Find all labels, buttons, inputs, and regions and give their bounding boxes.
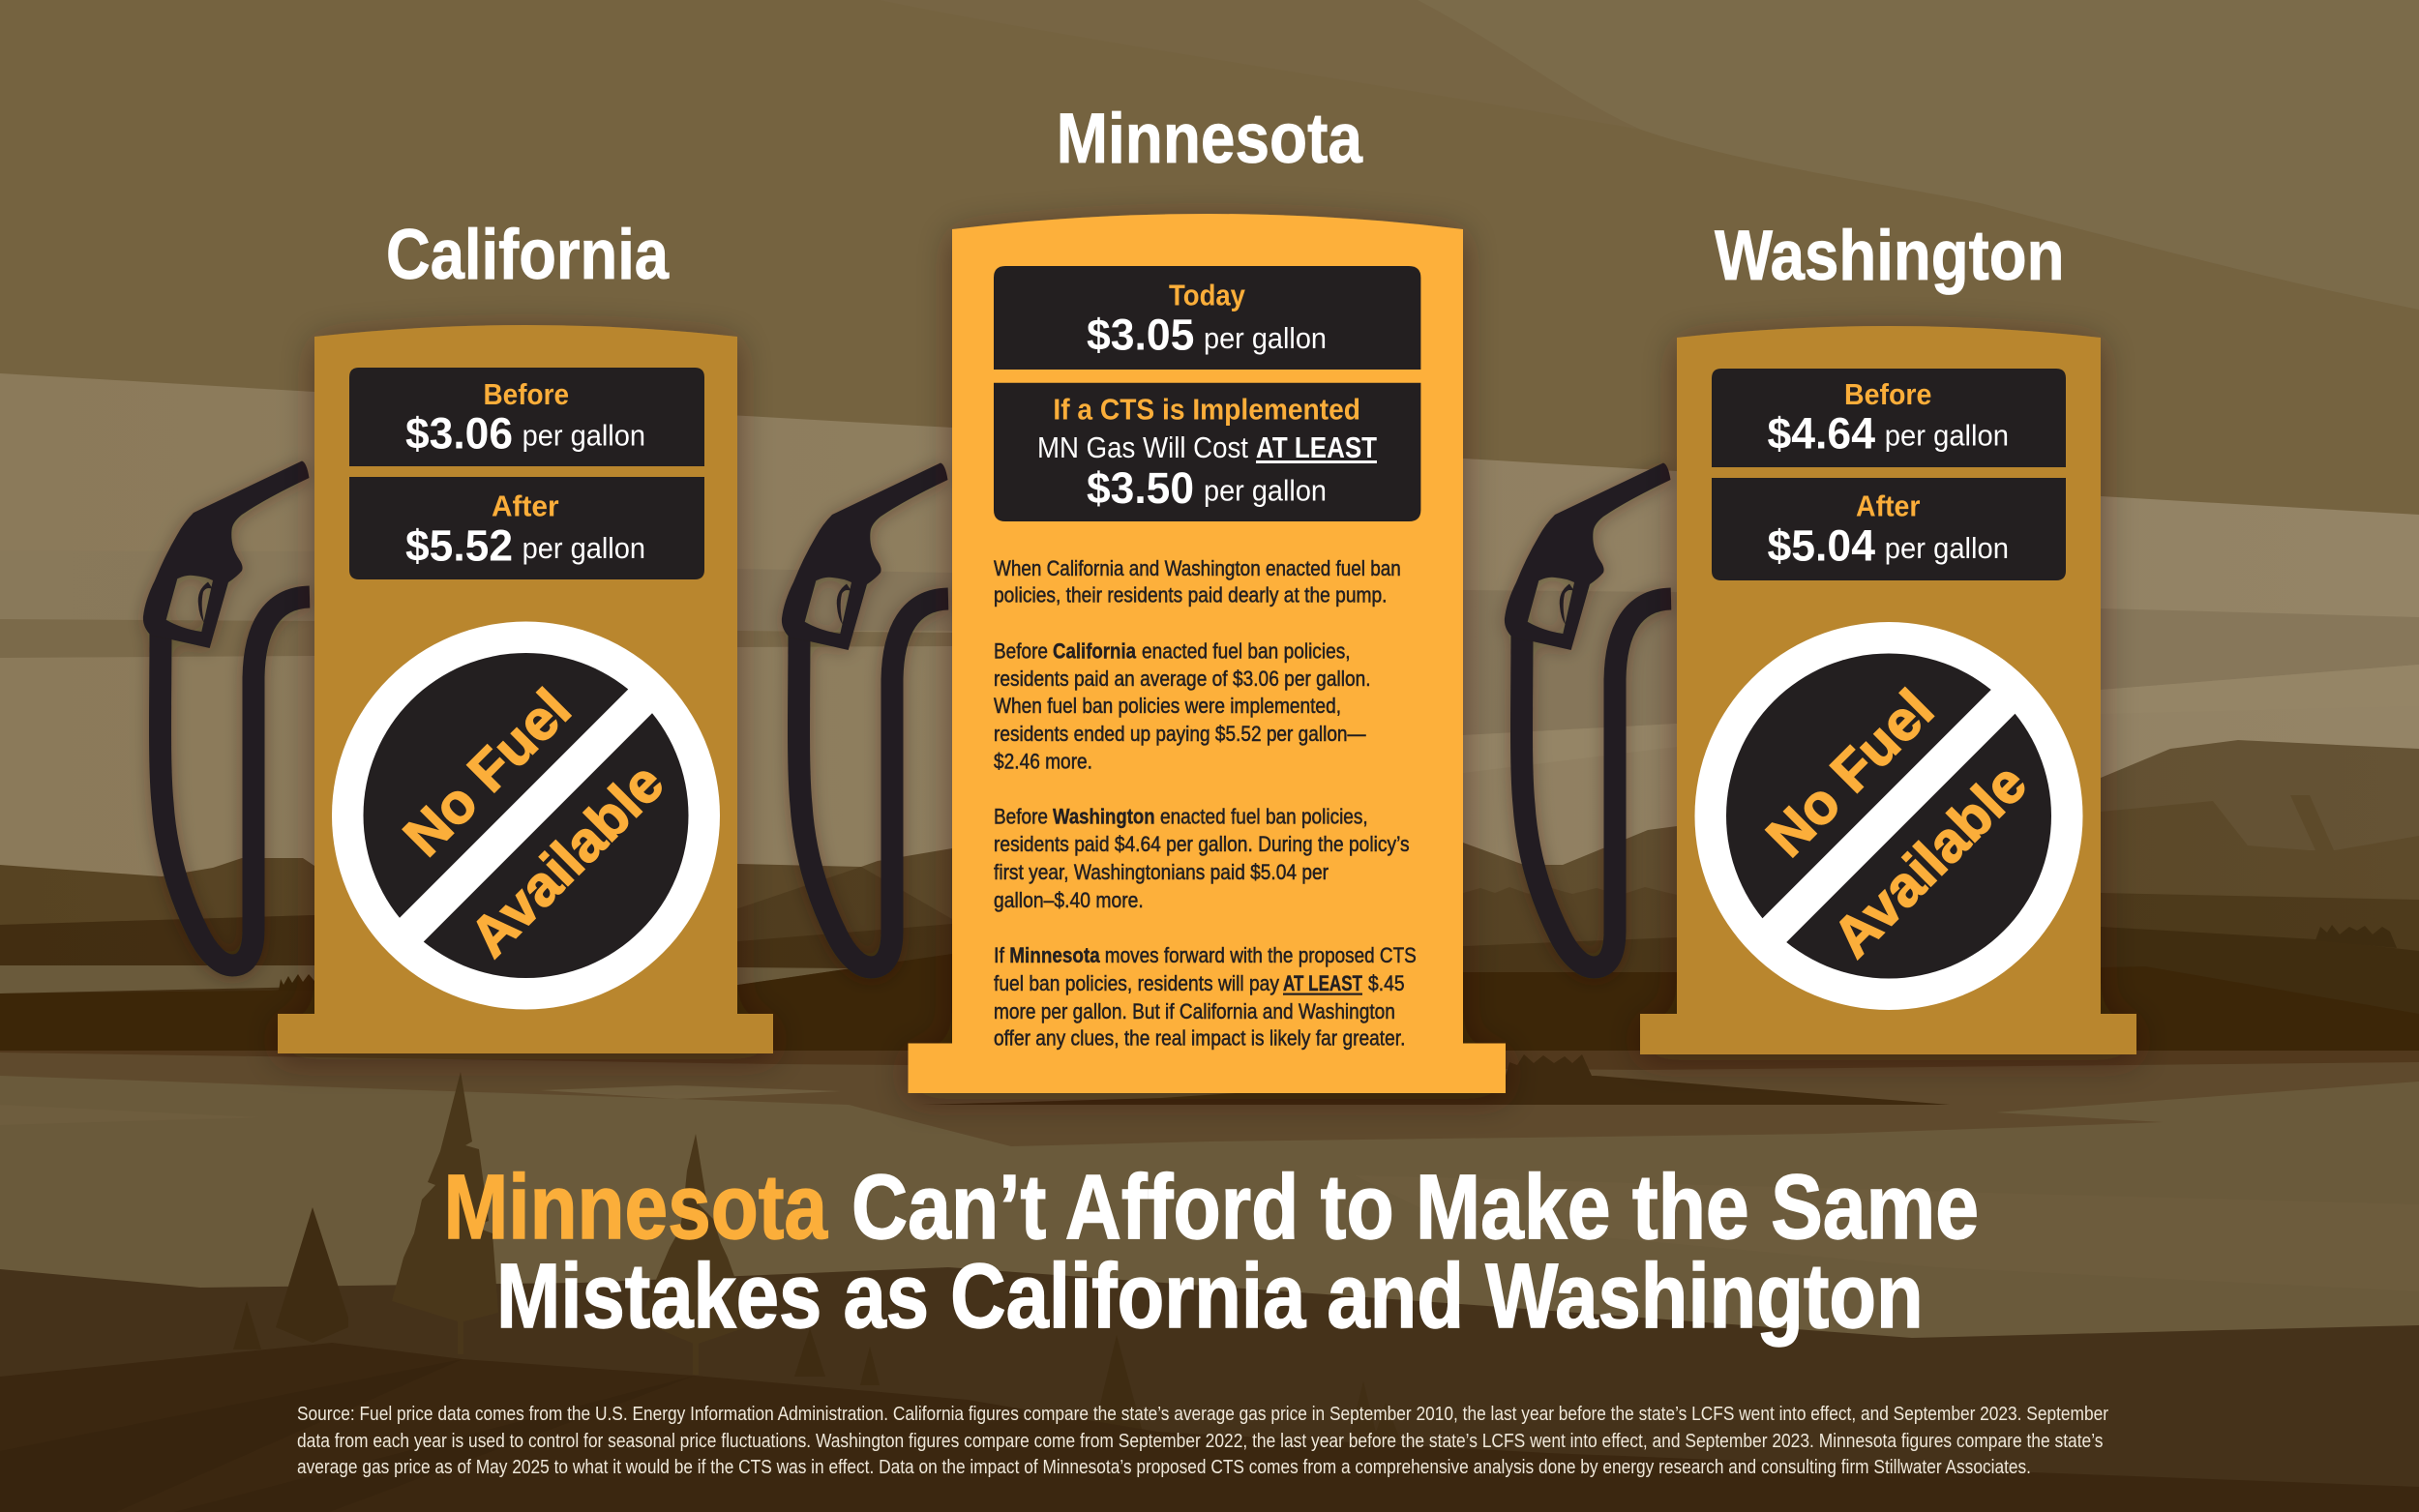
body text: Washington: [994, 805, 1410, 912]
body text: Minnesota: Minnesota: [1009, 943, 1100, 967]
body text: Washington: first year, Washingtonians paid $5.04 per: [994, 860, 1329, 884]
icon: Washington fuel nozzle and hose: [1505, 462, 1671, 967]
body text: Washington: enacted fuel ban policies,: [1160, 805, 1368, 829]
price box: today: [994, 266, 1420, 370]
price box: before: Before: [484, 377, 569, 411]
body text: California: residents ended up paying $5.52 per gallon—: [994, 722, 1366, 746]
price box: if a CTS is implemented: MN Gas Will Cost: [1037, 430, 1248, 464]
pump body: [908, 214, 1506, 1093]
price box: after: $5.52: [405, 520, 513, 571]
price box: after: After: [1856, 489, 1920, 522]
body text: introduction: policies, their residents paid dearly at the pump.: [994, 582, 1388, 607]
title: Mistakes as California and Washington: [496, 1245, 1924, 1348]
body text: introduction: [994, 556, 1401, 607]
price box: after: [1712, 478, 2066, 580]
body text: California: California: [1053, 638, 1137, 664]
background trees: [233, 1072, 1402, 1444]
icon: California fuel nozzle and hose: [143, 460, 310, 965]
body text: California: [994, 638, 1371, 774]
price box: if a CTS is implemented: AT LEAST: [1256, 430, 1377, 464]
body text: introduction: When California and Washington enacted fuel ban: [994, 556, 1401, 580]
price box: if a CTS is implemented: per gallon: [1204, 474, 1327, 507]
body text: Minnesota: AT LEAST: [1283, 971, 1362, 995]
price box: after: After: [492, 489, 559, 522]
price box: before: Before: [1844, 377, 1931, 411]
icon: Minnesota fuel nozzle and hose: [782, 462, 948, 967]
body text: Washington: Before: [994, 805, 1048, 829]
heading: California: California: [386, 216, 670, 294]
source note: [297, 1404, 2108, 1478]
panel: Minnesota pump: [908, 100, 1506, 1093]
body text: California: Before: [994, 638, 1048, 664]
body text: Minnesota: [994, 943, 1417, 1051]
price box: after: [349, 477, 704, 579]
body text: California: When fuel ban policies were implemented,: [994, 694, 1341, 718]
pump body: [278, 325, 773, 1053]
source note: data from each year is used to control for seasonal price fluctuations. Washington figures compare come from September 2022, the last year before the state’s LCFS went into effect, and September 2023. Minnesota figures compare the state’s: [297, 1431, 2104, 1452]
title: [443, 1156, 1979, 1348]
price box: before: $4.64: [1767, 408, 1875, 459]
price box: if a CTS is implemented: $3.50: [1087, 463, 1194, 513]
body text: Minnesota: moves forward with the proposed CTS: [1105, 943, 1417, 967]
price box: after: per gallon: [1885, 531, 2009, 565]
source note: Source: Fuel price data comes from the U.S. Energy Information Administration. California figures compare the state’s average gas price in September 2010, the last year before the state’s LCFS went into effect, and September 2023. September: [297, 1404, 2108, 1425]
price box: if a CTS is implemented: [994, 383, 1420, 521]
title: Can’t Afford to Make the Same: [851, 1156, 1979, 1259]
price box: before: [1712, 369, 2066, 467]
source note: average gas price as of May 2025 to what it would be if the CTS was in effect. Data on the impact of Minnesota’s proposed CTS comes from a comprehensive analysis done by energy research and consulting firm Stillwater Associates.: [297, 1457, 2031, 1478]
heading: Minnesota: Minnesota: [1057, 100, 1363, 178]
body text: Minnesota: $.45: [1368, 971, 1405, 995]
body text: Minnesota: more per gallon. But if California and Washington: [994, 999, 1395, 1023]
icon: no fuel available sign: [1695, 622, 2082, 1010]
pump body: [1640, 326, 2136, 1054]
icon: no fuel available sign: Available: [458, 752, 675, 968]
title: Minnesota: [443, 1156, 828, 1259]
price box: today: $3.05: [1087, 310, 1194, 360]
body text: Washington: residents paid $4.64 per gallon. During the policy’s: [994, 832, 1410, 856]
price box: before: [349, 368, 704, 466]
price box: before: per gallon: [1885, 418, 2009, 453]
body text: Washington: gallon–$.40 more.: [994, 888, 1144, 912]
body text: Minnesota: fuel ban policies, residents will pay: [994, 971, 1279, 995]
body text: California: $2.46 more.: [994, 750, 1092, 774]
body text: California: residents paid an average of $3.06 per gallon.: [994, 667, 1371, 691]
icon: no fuel available sign: No Fuel: [392, 677, 582, 868]
icon: no fuel available sign: No Fuel: [1754, 678, 1946, 869]
price box: after: per gallon: [523, 531, 645, 565]
heading: Washington: Washington: [1715, 217, 2065, 295]
price box: today: Today: [1169, 279, 1246, 312]
price box: today: per gallon: [1204, 321, 1327, 355]
icon: no fuel available sign: Available: [1821, 752, 2039, 969]
body text: Minnesota: If: [994, 943, 1005, 967]
price box: before: $3.06: [405, 408, 513, 459]
price box: before: per gallon: [523, 418, 645, 453]
panel: California pump: [278, 216, 773, 1053]
icon: no fuel available sign: [332, 621, 720, 1010]
body text: California: enacted fuel ban policies,: [1142, 638, 1351, 664]
body text: Washington: Washington: [1053, 805, 1155, 829]
dark foreground hill: [0, 1343, 2419, 1512]
body text: Minnesota: offer any clues, the real impact is likely far greater.: [994, 1025, 1405, 1051]
price box: after: $5.04: [1767, 520, 1875, 571]
price box: if a CTS is implemented: If a CTS is Implemented: [1053, 393, 1360, 427]
panel: Washington pump: [1640, 217, 2136, 1054]
